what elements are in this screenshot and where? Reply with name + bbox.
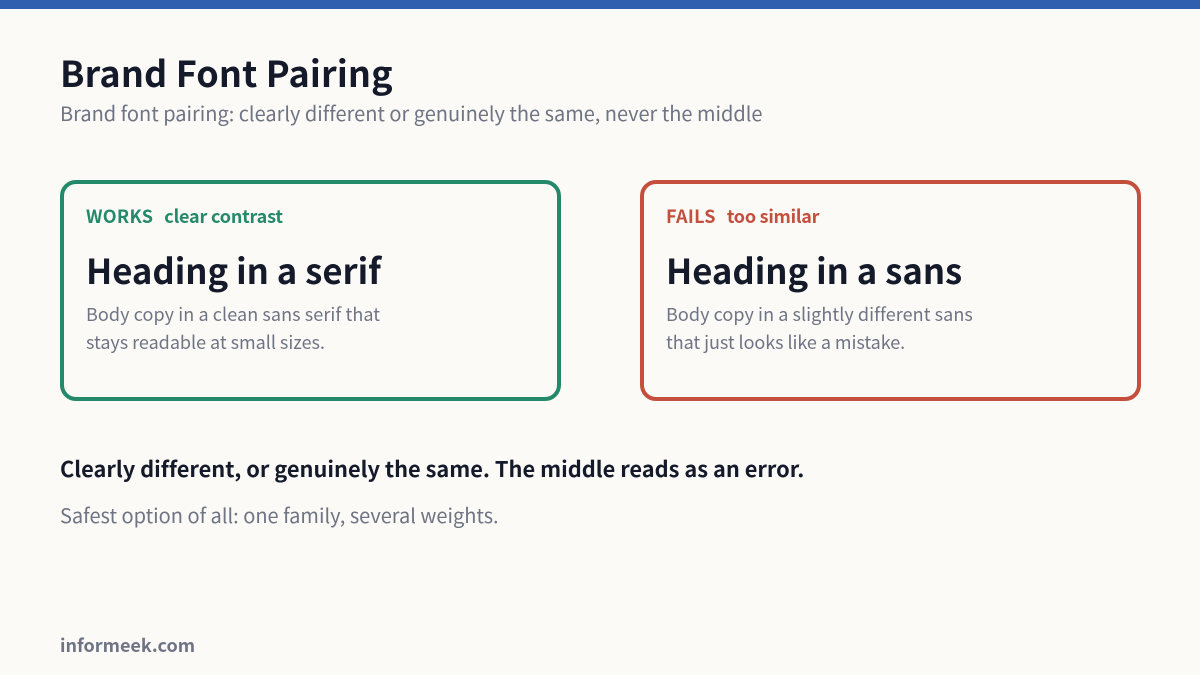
subtitle: Brand font pairing: clearly different or genuinely the same, never the middle (60, 98, 762, 127)
body copy: works (86, 301, 380, 355)
title: Brand Font Pairing (60, 46, 393, 98)
takeaway: Clearly different, or genuinely the same. The middle reads as an error. (60, 453, 804, 484)
heading: sans example: Heading in a sans (666, 244, 962, 294)
panel: works (60, 180, 561, 401)
body copy: fails (666, 301, 973, 355)
secondary note: Safest option of all: one family, several weights. (60, 500, 499, 529)
panel: fails (640, 180, 1141, 401)
label: works: WORKS clear contrast (86, 203, 283, 229)
body copy: fails: Body copy in a slightly different sans (666, 301, 973, 327)
heading: serif example: Heading in a serif (86, 244, 381, 294)
top accent bar (0, 0, 1200, 9)
body copy: fails: that just looks like a mistake. (666, 329, 905, 355)
footer brand: informeek.com (60, 632, 195, 658)
label: fails: FAILS too similar (666, 203, 819, 229)
body copy: works: Body copy in a clean sans serif that (86, 301, 380, 327)
body copy: works: stays readable at small sizes. (86, 329, 325, 355)
